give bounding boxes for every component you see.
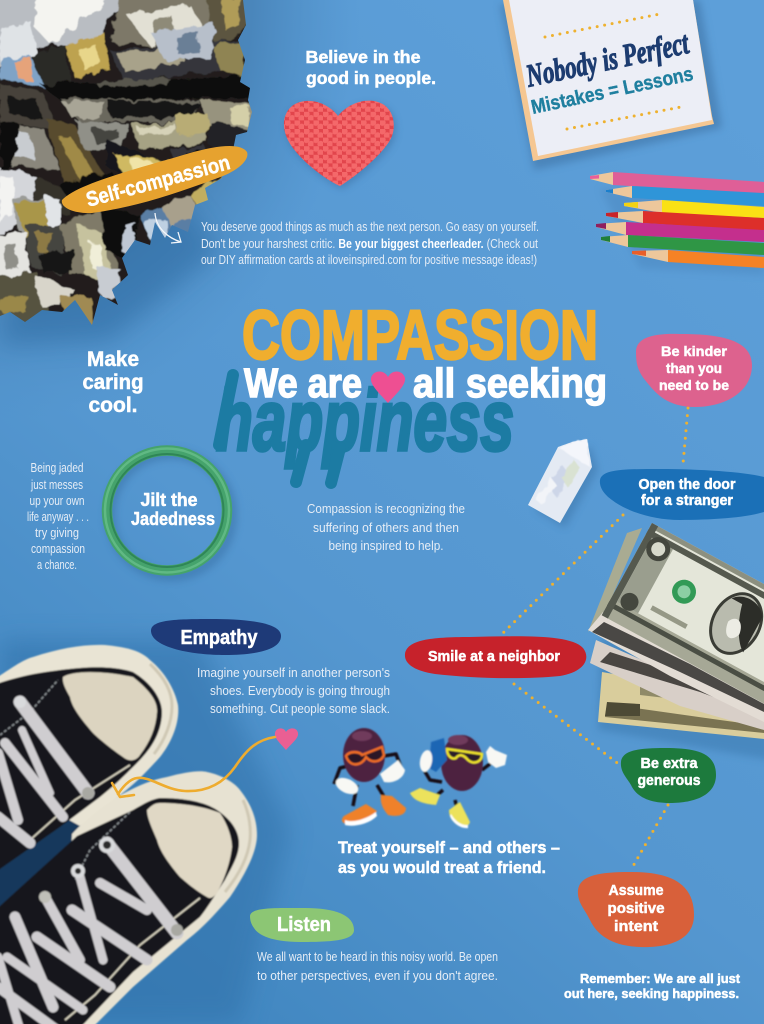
badge: smile at a neighbor: Smile at a neighbor — [428, 648, 560, 665]
red pencil — [606, 211, 764, 231]
blue pencil — [606, 186, 764, 206]
badge: be extra generous: Be extra — [640, 756, 698, 772]
heading: believe in the good in people: Believe in the — [306, 47, 421, 67]
body text: empathy: Imagine yourself in another person's — [197, 666, 390, 680]
pink pencil — [590, 172, 764, 194]
subtitle part: all seeking: all seeking — [413, 360, 607, 406]
subtitle part: happiness script: happiness — [216, 373, 514, 469]
body text: compassion definition — [307, 502, 465, 553]
badge: be kinder than you need to be: need to be — [659, 377, 729, 393]
body text: listen: to other perspectives, even if you don't agree. — [257, 969, 498, 983]
bottom sneaker laces — [0, 843, 177, 1024]
photo: silver and gold foil pom-pom — [0, 0, 252, 325]
badge: open the door for a stranger: for a stranger — [641, 493, 733, 509]
body text: being jaded: compassion — [31, 542, 85, 556]
body text: self-compassion: You deserve good things as much as the next person. Go easy on yourself. — [201, 220, 539, 234]
badge: assume positive intent: positive — [608, 900, 664, 917]
green pencil — [601, 235, 764, 255]
body text: self-compassion: Don't be your harshest critic. Be your biggest cheerleader. (Check out — [201, 237, 538, 251]
magenta pencil — [596, 222, 764, 242]
body text: empathy: something. Cut people some slack. — [210, 702, 390, 716]
ten dollar bill — [598, 672, 764, 739]
badge: open the door for a stranger — [600, 469, 764, 520]
body text: listen: We all want to be heard in this noisy world. Be open — [257, 950, 498, 964]
photo: sneakers — [0, 645, 257, 1024]
body text: being jaded: Being jaded — [30, 461, 84, 475]
body text: being jaded: just messes — [30, 478, 83, 492]
orange pencil — [632, 250, 764, 268]
body text: compassion definition: Compassion is recognizing the — [307, 502, 465, 516]
body text: self-compassion: our DIY affirmation cards at iloveinspired.com for positive message ideas!) — [201, 253, 537, 267]
photo: raisin figures — [333, 728, 507, 828]
heading: treat yourself: as you would treat a friend. — [338, 858, 546, 877]
body text: being jaded: up your own — [30, 494, 85, 508]
badge: be kinder than you need to be: than you — [666, 360, 722, 376]
badge: assume positive intent: intent — [614, 918, 658, 935]
photo: crystal — [528, 439, 598, 528]
notepad message — [522, 14, 695, 129]
badge: empathy — [151, 619, 281, 655]
body text: listen — [257, 950, 498, 983]
icon: small pink heart — [275, 728, 298, 750]
body text: being jaded — [27, 461, 89, 572]
heading: make caring cool: cool. — [88, 394, 138, 417]
heading: make caring cool: Make — [87, 348, 139, 371]
left raisin figure — [333, 728, 406, 826]
heading: treat yourself: Treat yourself – and others – — [338, 838, 560, 857]
body text: being jaded: a chance. — [37, 558, 77, 572]
closing note — [564, 972, 741, 1001]
photo: green bangle — [105, 448, 232, 576]
photo: notepad — [500, 0, 722, 170]
icon: pink heart in title — [371, 371, 405, 403]
main title — [216, 296, 607, 483]
arrow: yellow curve from heart to shoes — [112, 737, 275, 797]
closing note: Remember: We are all just — [580, 972, 741, 986]
gap shadow between sneakers — [0, 800, 90, 925]
photo: colored pencils — [590, 172, 764, 275]
arrow: self-compassion to text — [155, 213, 181, 243]
title: compassion: COMPASSION — [242, 296, 598, 374]
body text: compassion definition: suffering of others and then — [313, 521, 459, 535]
heading: treat yourself — [338, 838, 560, 877]
heading: believe in the good in people — [306, 47, 436, 88]
badge: smile at a neighbor — [405, 636, 586, 678]
badge: assume positive intent: Assume — [608, 882, 664, 899]
badge: assume positive intent — [578, 872, 694, 947]
badge: empathy: Empathy — [180, 627, 258, 649]
subtitle part: happiness script — [216, 373, 514, 483]
icon: bead heart — [284, 101, 396, 189]
label: jilt the jadedness — [131, 490, 215, 529]
heading: believe in the good in people: good in people. — [306, 68, 436, 88]
label: jilt the jadedness: Jadedness — [131, 509, 215, 529]
heading: make caring cool: caring — [82, 371, 144, 394]
right raisin figure — [410, 735, 507, 828]
notepad message: Nobody is Perfect — [522, 24, 692, 94]
heading: make caring cool — [82, 348, 144, 417]
subtitle part: we are: We are — [244, 360, 362, 406]
body text: self-compassion — [201, 220, 539, 267]
badge: self-compassion: Self-compassion — [84, 151, 233, 212]
badge: be extra generous — [621, 748, 716, 803]
body text: compassion definition: being inspired to help. — [328, 539, 444, 553]
body text: empathy: shoes. Everybody is going through — [210, 684, 390, 698]
notepad message: Mistakes = Lessons — [529, 63, 695, 119]
badge: be kinder than you need to be — [636, 334, 752, 407]
one dollar bill — [602, 523, 764, 711]
badge: be kinder than you need to be: Be kinder — [661, 343, 728, 359]
top sneaker laces — [0, 702, 88, 843]
bottom sneaker — [0, 771, 257, 1024]
closing note: out here, seeking happiness. — [564, 987, 739, 1001]
badge: open the door for a stranger: Open the door — [638, 477, 736, 493]
dotted connectors between kindness actions — [503, 408, 688, 868]
badge: be extra generous: generous — [638, 773, 700, 789]
photo: dollar bills — [588, 523, 764, 760]
badge: listen — [250, 908, 354, 942]
back bill edge — [588, 528, 642, 632]
five dollar bills — [588, 612, 764, 730]
body text: being jaded: try giving — [35, 526, 79, 540]
top sneaker — [0, 645, 178, 876]
body text: empathy — [197, 666, 390, 716]
badge: listen: Listen — [277, 914, 331, 936]
yellow pencil — [624, 200, 764, 218]
body text: being jaded: life anyway . . . — [27, 510, 89, 524]
label: jilt the jadedness: Jilt the — [140, 490, 198, 510]
